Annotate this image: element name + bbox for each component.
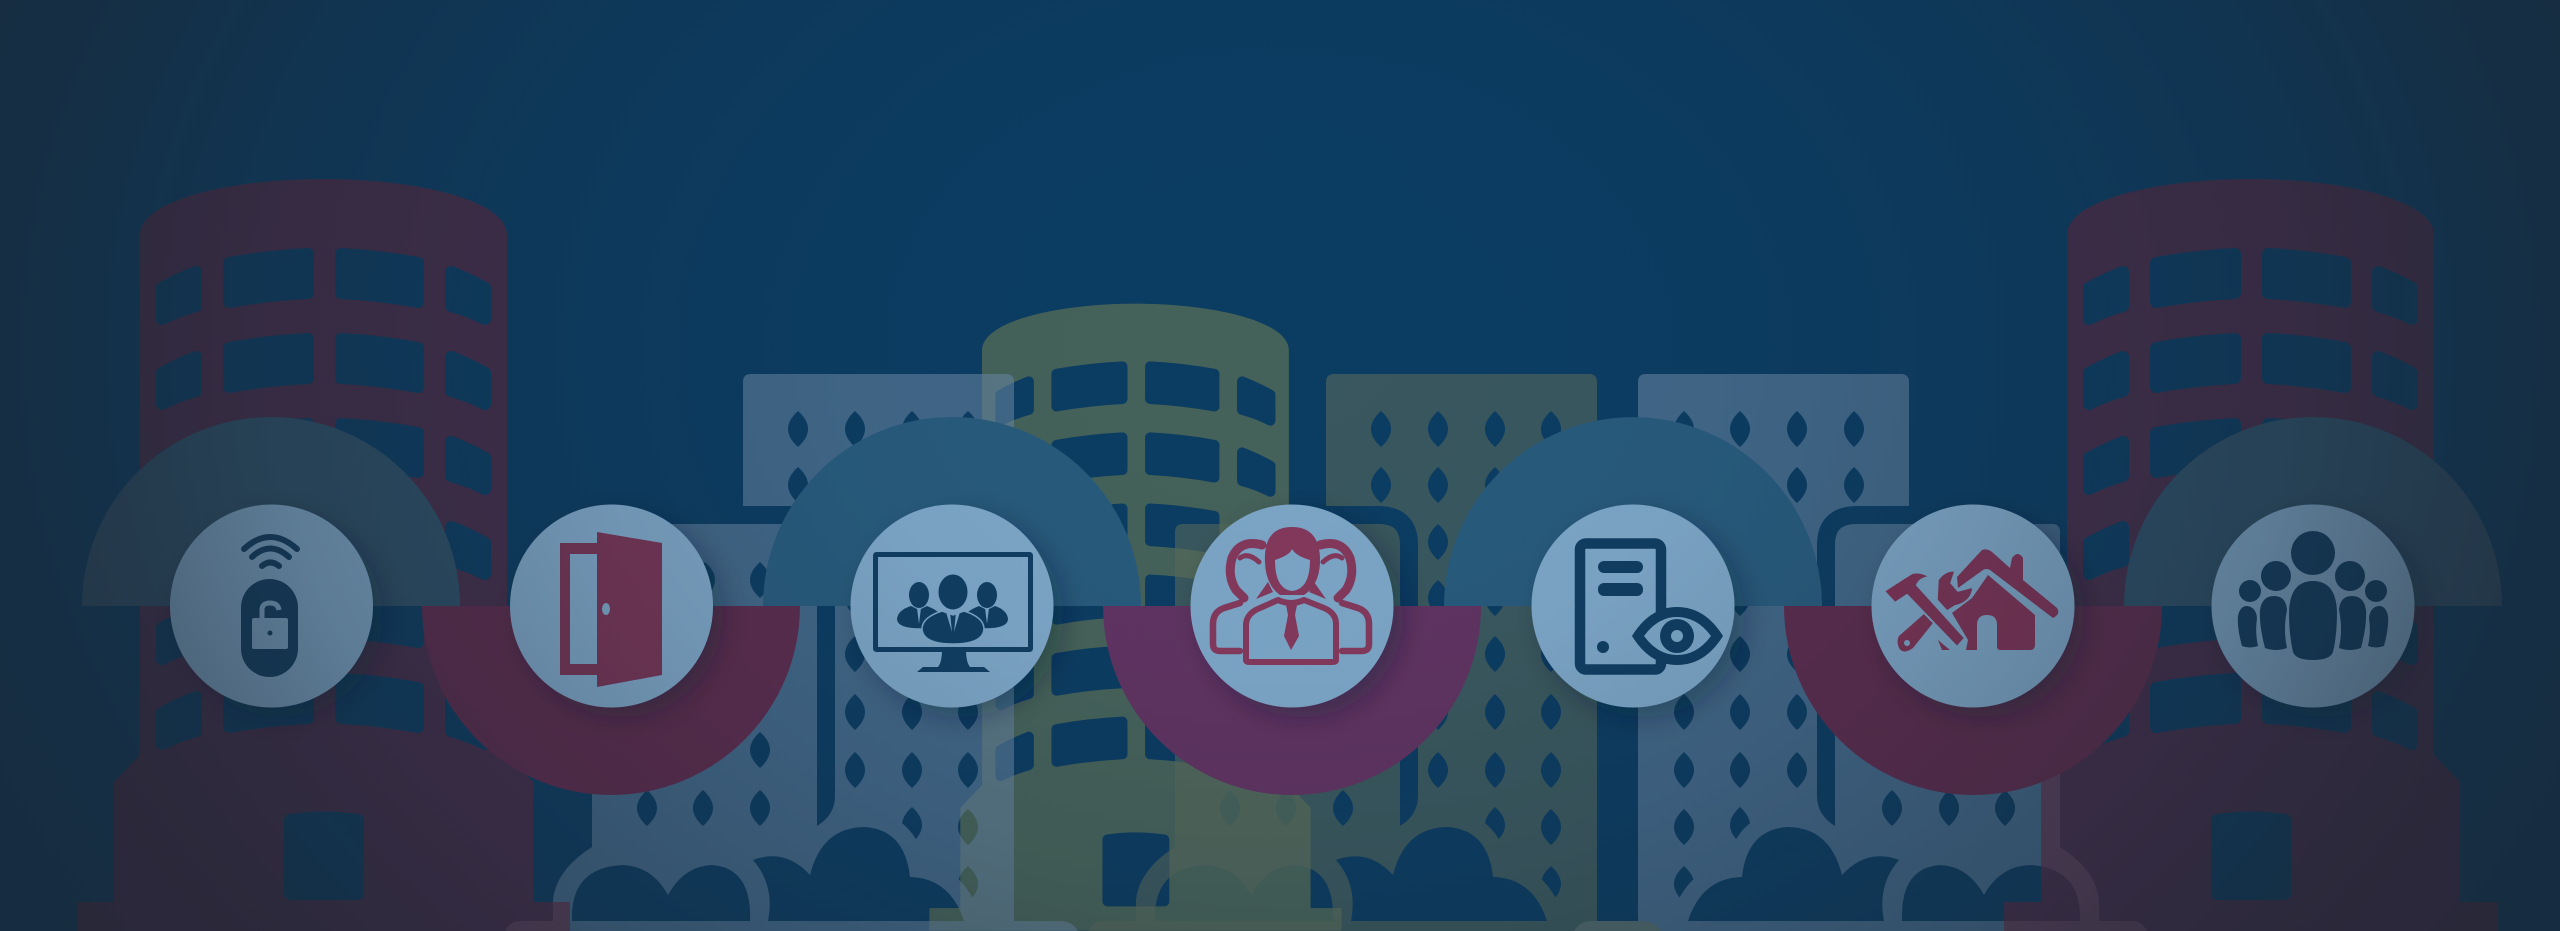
lower arc 4 — [1103, 606, 1481, 795]
circle 3 monitor conference — [850, 504, 1054, 708]
icon part: left colleague — [1213, 544, 1273, 651]
upper arc 7 — [2124, 417, 2502, 606]
icon: hammer wrench house — [1884, 549, 2058, 652]
circle 2 door — [510, 504, 713, 708]
red round tower left — [0, 0, 700, 931]
icon: monitor with three people — [876, 554, 1030, 672]
red round tower right — [1927, 0, 2560, 931]
icon: crowd of people — [2238, 531, 2388, 660]
icon: open door — [560, 532, 662, 687]
icon part: right colleague — [1309, 544, 1369, 651]
olive round tower centre — [865, 154, 1450, 931]
city illustration and icon chain — [77, 179, 2502, 931]
olive building centre right — [1063, 350, 1703, 931]
circle 6 tools house — [1872, 504, 2074, 708]
icon: server with eye — [1580, 544, 1723, 670]
upper arc 5 — [1444, 417, 1822, 606]
circle 1 smart lock — [170, 504, 373, 708]
lower arc 2 — [422, 606, 800, 795]
icon part: centre person — [1265, 527, 1320, 595]
circle 4 team — [1190, 504, 1394, 708]
icon: team outline — [1213, 527, 1369, 662]
icon: wireless lock — [241, 537, 298, 677]
circle 5 server eye — [1532, 504, 1734, 708]
circle 7 crowd — [2212, 504, 2414, 708]
upper arc 1 — [82, 417, 460, 606]
blue building right — [1532, 350, 2172, 931]
blue building left — [480, 350, 1120, 931]
upper arc 3 — [763, 417, 1141, 606]
lower arc 6 — [1784, 606, 2162, 795]
